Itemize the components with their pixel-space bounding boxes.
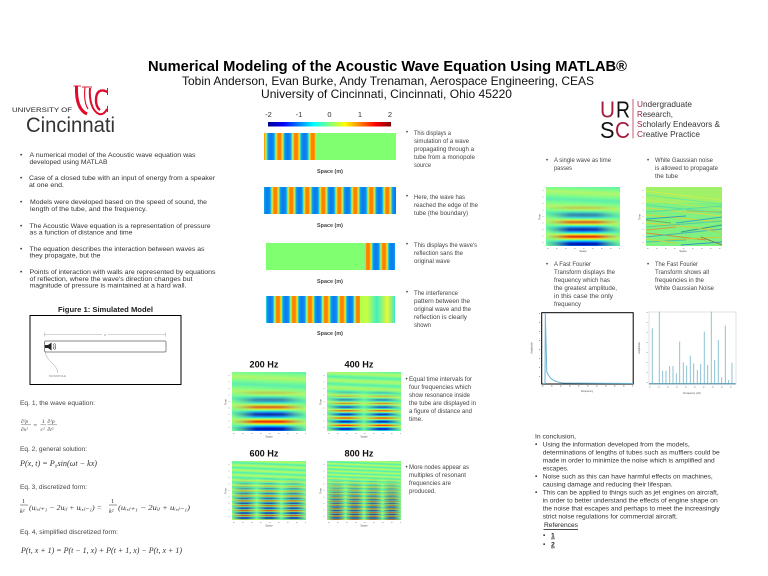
equations bbox=[19, 400, 191, 555]
axis label: Space (m) bbox=[317, 279, 343, 285]
intro bullet list: magnitude of pressure is maintained at a hard wall. bbox=[30, 282, 187, 290]
eq 3 bbox=[20, 498, 191, 515]
single wave note: A single wave as time bbox=[554, 157, 612, 164]
FFT noise note: frequencies in the bbox=[655, 277, 705, 284]
200 Hz chart: Time bbox=[224, 399, 228, 405]
URSC logo: S bbox=[600, 117, 614, 143]
600 Hz chart: Time bbox=[224, 488, 228, 494]
200 Hz chart bbox=[224, 372, 306, 438]
intro bullet list: • bbox=[20, 269, 23, 276]
conclusion: Noise such as this can have harmful effects on machines, bbox=[543, 474, 713, 480]
eq 4 label: Eq. 4, simplified discretized form: bbox=[20, 529, 118, 536]
intro bullet list: • bbox=[20, 152, 23, 159]
single wave chart bbox=[538, 187, 620, 253]
snapshot 1: wave propagating bbox=[264, 133, 396, 160]
intro bullet list: Points of interaction with walls are represented by equations bbox=[30, 269, 216, 276]
resonance notes: time. bbox=[409, 416, 423, 423]
intro bullet list: they propagate, but the bbox=[30, 252, 101, 260]
intro bullet list: The Acoustic Wave equation is a representation of pressure bbox=[30, 223, 211, 230]
white noise chart bbox=[638, 187, 722, 253]
axis label: Space (m) bbox=[317, 331, 343, 337]
conclusion: • bbox=[535, 442, 538, 448]
figure frame bbox=[30, 316, 181, 384]
eq 3: (uᵢ,ⱼ₊₁ − 2uᵢⱼ + uᵢ,ⱼ₋₁) bbox=[118, 503, 191, 512]
600 Hz chart bbox=[224, 461, 306, 528]
eq 3: 1 bbox=[111, 498, 114, 505]
single wave note: passes bbox=[554, 165, 572, 172]
FFT chart: single wave: Frequency bbox=[581, 389, 594, 393]
icon: UC mark bbox=[74, 86, 108, 114]
resonance notes: four frequencies which bbox=[409, 384, 471, 391]
snapshot notes: • bbox=[406, 241, 408, 248]
eq 3 label: Eq. 3, discretized form: bbox=[20, 484, 87, 491]
FFT single wave note: • bbox=[546, 261, 548, 268]
FFT single wave note: the greatest amplitude, bbox=[554, 285, 617, 292]
snapshot notes: reached the edge of the bbox=[414, 202, 479, 209]
icon: speaker bbox=[45, 342, 56, 350]
colour scale bbox=[265, 110, 392, 126]
intro bullet list: The equation describes the interaction between waves as bbox=[30, 246, 205, 253]
snapshot notes: This displays the wave's bbox=[414, 242, 477, 249]
eq 1: ∂²p bbox=[21, 419, 28, 425]
resonance notes: More nodes appear as bbox=[409, 464, 469, 471]
400 Hz chart: Space bbox=[360, 434, 368, 438]
snapshot notes bbox=[406, 129, 479, 329]
resonance notes: the tube are displayed in bbox=[409, 400, 476, 407]
800 Hz chart: Time bbox=[318, 488, 322, 494]
colour scale: 2 bbox=[388, 110, 392, 119]
FFT single wave note: in this case the only bbox=[554, 293, 614, 300]
snapshot notes: This displays a bbox=[414, 130, 452, 137]
intro bullet list: at one end. bbox=[29, 182, 64, 189]
figure heading: Figure 1: Simulated Model bbox=[58, 305, 153, 314]
intro bullet list: length of the tube, and the frequency. bbox=[30, 206, 147, 213]
figure 1: simulated model: x bbox=[104, 332, 106, 337]
URSC logo: Scholarly Endeavors & bbox=[637, 119, 720, 129]
snapshot notes: simulation of a wave bbox=[414, 138, 470, 145]
600 Hz heading: 600 Hz bbox=[250, 448, 279, 460]
FFT single wave note: frequency bbox=[554, 301, 582, 308]
snapshot notes: • bbox=[406, 289, 408, 296]
eq 1 bbox=[21, 419, 57, 433]
intro bullet list: Models were developed based on the speed of sound, the bbox=[30, 199, 207, 206]
resonance notes: a figure of distance and bbox=[409, 408, 472, 415]
URSC logo: U bbox=[600, 96, 615, 122]
conclusion: Using the information developed from the models, bbox=[543, 442, 690, 448]
University of Cincinnati logo: UNIVERSITY OF bbox=[12, 107, 72, 114]
title: Numerical Modeling of the Acoustic Wave Equation Using MATLAB® bbox=[148, 59, 627, 75]
FFT chart: white noise: Amplitude bbox=[637, 342, 641, 354]
FFT chart: single wave: Amplitude bbox=[530, 342, 534, 354]
resonance notes bbox=[406, 376, 476, 495]
conclusion bbox=[535, 434, 720, 520]
URSC logo: Research, bbox=[637, 109, 673, 119]
resonance heat maps bbox=[224, 360, 401, 528]
conclusion: This can be applied to things such as jet engines on aircraft, bbox=[543, 490, 719, 496]
white noise note: White Gaussian noise bbox=[655, 157, 714, 164]
FFT single wave note: A Fast Fourier bbox=[554, 261, 591, 268]
colour scale: -1 bbox=[296, 110, 302, 119]
snapshot notes: shown bbox=[414, 322, 431, 329]
URSC logo: C bbox=[615, 117, 630, 143]
resonance notes: Equal time intervals for bbox=[409, 376, 472, 383]
800 Hz chart: Space bbox=[360, 524, 368, 528]
monopole lead line bbox=[45, 352, 58, 373]
200 Hz chart: Space bbox=[265, 434, 273, 438]
axis label: Space (m) bbox=[317, 223, 343, 229]
single wave chart: Space bbox=[579, 249, 587, 253]
intro bullet list: Case of a closed tube with an input of energy from a speaker bbox=[29, 175, 216, 182]
conclusion: in order to better understand the effects of engine shape on bbox=[543, 498, 718, 504]
eq 3: k² bbox=[109, 509, 114, 515]
white noise note bbox=[647, 157, 719, 180]
FFT chart: white noise: Frequency (Hz) bbox=[683, 391, 701, 395]
FFT noise note: The Fast Fourier bbox=[655, 261, 698, 268]
references bbox=[543, 522, 579, 548]
intro bullet list: • bbox=[20, 199, 23, 206]
conclusion: determinations of lengths of tubes such as mufflers could be bbox=[543, 450, 720, 456]
snapshot notes: Here, the wave has bbox=[414, 194, 465, 201]
resonance notes: frequencies are bbox=[409, 480, 452, 487]
eq 1: 1 bbox=[42, 419, 45, 425]
URSC logo: Undergraduate bbox=[637, 99, 692, 109]
snapshot notes: original wave and the bbox=[414, 306, 472, 313]
conclusion: escapes. bbox=[543, 466, 569, 472]
eq 3: (uᵢ,ⱼ₊₁ − 2uᵢⱼ + uᵢ,ⱼ₋₁) = bbox=[29, 503, 102, 512]
resonance notes: multiples of resonant bbox=[409, 472, 466, 479]
snapshot notes: source bbox=[414, 162, 432, 169]
intro bullet list: • bbox=[20, 175, 23, 182]
snapshot notes: The interference bbox=[414, 290, 459, 297]
eq 4: P(t, x + 1) = P(t − 1, x) + P(t + 1, x) − P(t, x + 1) bbox=[20, 546, 182, 555]
eq 1: ∂x² bbox=[21, 427, 28, 433]
affiliation: University of Cincinnati, Cincinnati, Ohio 45220 bbox=[261, 87, 512, 101]
eq 2 label: Eq. 2, general solution: bbox=[20, 446, 87, 453]
intro bullet list: • bbox=[20, 223, 23, 230]
resonance notes: • bbox=[406, 376, 408, 383]
eq 1: = bbox=[33, 422, 37, 429]
snapshot 3: reflection bbox=[266, 243, 395, 270]
white noise note: • bbox=[647, 157, 649, 164]
FFT single wave note: Transform displays the bbox=[554, 269, 616, 276]
snapshot notes: tube (the boundary) bbox=[414, 210, 468, 217]
white noise chart: Time bbox=[638, 214, 642, 220]
colour scale: -2 bbox=[265, 110, 272, 119]
URSC logo: Creative Practice bbox=[637, 129, 700, 139]
snapshot notes: reflection is clearly bbox=[414, 314, 468, 321]
conclusion: strict noise regulations for commercial aircraft. bbox=[543, 514, 678, 520]
400 Hz chart: Time bbox=[318, 399, 322, 405]
wave snapshots bbox=[264, 133, 396, 337]
references: • bbox=[543, 542, 546, 548]
400 Hz heading: 400 Hz bbox=[344, 360, 374, 370]
snapshot 2: wave at boundary bbox=[264, 187, 396, 214]
resonance notes: • bbox=[406, 464, 408, 471]
axis label: Space (m) bbox=[317, 169, 343, 175]
single wave note bbox=[546, 157, 612, 172]
FFT noise note: • bbox=[647, 261, 649, 268]
conclusion: • bbox=[535, 474, 538, 480]
400 Hz chart bbox=[318, 372, 401, 438]
colour scale: 1 bbox=[358, 110, 362, 119]
white noise note: is allowed to propagate bbox=[655, 165, 719, 172]
single wave note: • bbox=[546, 157, 548, 164]
University of Cincinnati logo: Cincinnati bbox=[26, 114, 115, 137]
FFT single wave note bbox=[546, 261, 617, 308]
colour scale: 0 bbox=[327, 110, 332, 119]
200 Hz heading: 200 Hz bbox=[250, 360, 279, 370]
resonance notes: produced. bbox=[409, 488, 436, 495]
figure 1: simulated model bbox=[30, 305, 181, 384]
800 Hz chart bbox=[318, 461, 401, 528]
snapshot notes: original wave bbox=[414, 258, 451, 265]
resonance notes: show resonance inside bbox=[409, 392, 471, 399]
intro bullet list: A numerical model of the Acoustic wave equation was bbox=[30, 152, 196, 159]
800 Hz heading: 800 Hz bbox=[344, 448, 374, 460]
monopole label: MONOPOLE bbox=[49, 374, 66, 378]
eq 1: ∂t² bbox=[48, 427, 54, 433]
authors: Tobin Anderson, Evan Burke, Andy Trenaman, Aerospace Engineering, CEAS bbox=[182, 74, 594, 88]
title block bbox=[148, 59, 627, 101]
URSC logo: R bbox=[616, 96, 630, 122]
eq 3: 1 bbox=[22, 498, 25, 505]
snapshot notes: reflection sans the bbox=[414, 250, 464, 257]
snapshot notes: • bbox=[406, 129, 408, 136]
snapshot notes: pattern between the bbox=[414, 298, 471, 305]
eq 1 label: Eq. 1, the wave equation: bbox=[20, 400, 95, 407]
FFT noise note: White Gaussian Noise bbox=[655, 285, 715, 292]
conclusion: made in order to minimize the noise which is amplified and bbox=[543, 458, 715, 464]
references: • bbox=[543, 532, 546, 540]
URSC logo bbox=[600, 96, 720, 143]
eq 2: P(x, t) = P₀sin(ωt − kx) bbox=[19, 459, 97, 468]
intro bullet list: as a function of distance and time bbox=[30, 230, 133, 236]
600 Hz chart: Space bbox=[265, 524, 273, 528]
white noise note: the tube bbox=[655, 173, 679, 180]
intro bullet list bbox=[20, 152, 216, 290]
snapshot notes: tube from a monopole bbox=[414, 154, 476, 161]
FFT noise note bbox=[647, 261, 715, 292]
University of Cincinnati logo bbox=[12, 86, 115, 137]
references: References bbox=[544, 522, 579, 529]
intro bullet list: developed using MATLAB bbox=[30, 159, 108, 166]
conclusion: causing damage and reducing their lifespan. bbox=[543, 482, 673, 488]
FFT single wave note: frequency which has bbox=[554, 277, 610, 284]
FFT chart: white noise bbox=[637, 312, 736, 395]
snapshot notes: propagating through a bbox=[414, 146, 475, 153]
length dimension line bbox=[44, 332, 166, 336]
conclusion: In conclusion, bbox=[535, 434, 576, 440]
references: 1 bbox=[551, 532, 555, 540]
references: 2 bbox=[551, 542, 555, 548]
eq 3: k² bbox=[20, 509, 25, 515]
FFT noise note: Transform shows all bbox=[655, 269, 709, 276]
intro bullet list: of reflection, where the wave's direction changes but bbox=[30, 276, 193, 283]
tube bbox=[44, 341, 166, 352]
conclusion: • bbox=[535, 490, 538, 496]
conclusion: the noise that escapes and perhaps to meet the increasingly bbox=[543, 506, 720, 512]
white noise chart: Space bbox=[679, 249, 687, 253]
FFT chart: single wave bbox=[530, 313, 633, 393]
snapshot notes: • bbox=[406, 193, 408, 200]
snapshot 4: interference bbox=[266, 296, 395, 323]
eq 1: ∂²p bbox=[48, 419, 55, 425]
intro bullet list: • bbox=[20, 246, 23, 253]
single wave chart: Time bbox=[538, 214, 542, 220]
eq 1: c² bbox=[40, 427, 45, 433]
